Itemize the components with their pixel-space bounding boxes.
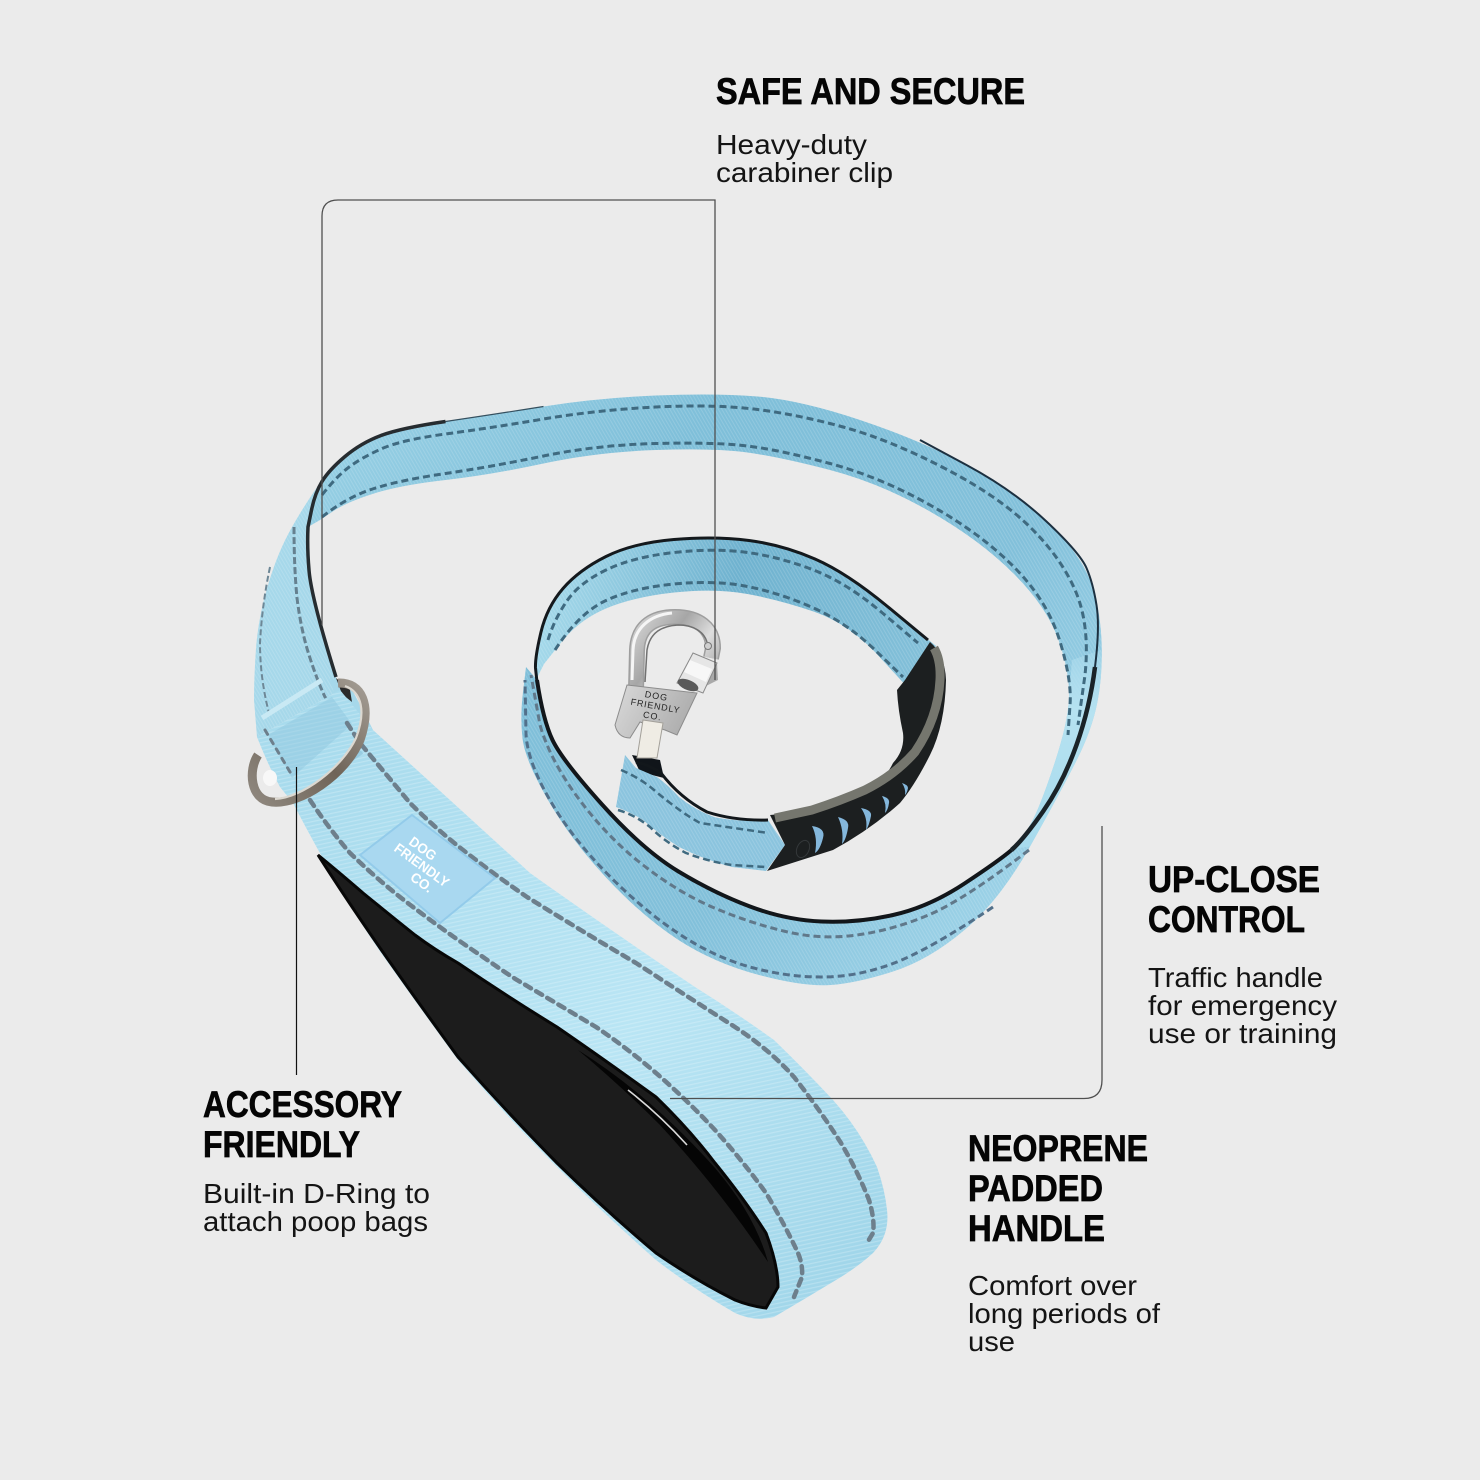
carabiner clip — [615, 613, 718, 758]
leash: main outer loop strap — [308, 394, 1102, 985]
callout: up-close control: UP-CLOSE — [1148, 859, 1320, 900]
callout: safe and secure: carabiner clip — [716, 157, 893, 188]
carabiner plate: DOG — [644, 689, 669, 703]
carabiner plate — [615, 685, 697, 738]
neoprene padding — [318, 855, 778, 1308]
callout: neoprene padded handle: PADDED — [968, 1168, 1103, 1209]
leash: left strap section — [254, 480, 347, 737]
leash: inner loop strap — [535, 538, 936, 690]
callout: safe and secure — [716, 71, 1025, 188]
rubber brand label — [360, 815, 495, 923]
callout: up-close control: Traffic handle — [1148, 962, 1323, 993]
callout: up-close control — [1148, 859, 1337, 1049]
callout: neoprene padded handle: HANDLE — [968, 1208, 1105, 1249]
callout: safe and secure: SAFE AND SECURE — [716, 71, 1025, 112]
leash illustration — [252, 394, 1102, 1319]
callout: up-close control: use or training — [1148, 1018, 1337, 1049]
callout: safe and secure: Heavy-duty — [716, 129, 867, 160]
traffic handle: rubber grip — [767, 642, 946, 871]
callout: neoprene padded handle: NEOPRENE — [968, 1128, 1148, 1169]
callout: neoprene padded handle: use — [968, 1326, 1015, 1357]
callout: up-close control: CONTROL — [1148, 899, 1305, 940]
rubber brand label: CO. — [407, 869, 436, 896]
leader line: accessory friendly to D-ring — [296, 767, 298, 1075]
leader line: safe and secure to carabiner — [322, 200, 715, 680]
callout: neoprene padded handle: long periods of — [968, 1298, 1160, 1329]
callout: accessory friendly — [203, 1084, 430, 1237]
rubber brand label: FRIENDLY — [391, 840, 453, 891]
callout: neoprene padded handle — [968, 1128, 1160, 1357]
leash: strap end tab at clip — [616, 755, 785, 871]
callout: neoprene padded handle: Comfort over — [968, 1270, 1137, 1301]
callout: accessory friendly: FRIENDLY — [203, 1124, 360, 1165]
leader line: up-close control and neoprene handle — [670, 826, 1102, 1098]
padded handle strap — [257, 678, 887, 1319]
callout: accessory friendly: ACCESSORY — [203, 1084, 402, 1125]
callout: up-close control: for emergency — [1148, 990, 1337, 1021]
carabiner plate: FRIENDLY — [630, 697, 681, 715]
callout: accessory friendly: Built-in D-Ring to — [203, 1178, 430, 1209]
icon: D-ring — [252, 683, 365, 802]
carabiner plate: CO. — [642, 709, 663, 723]
callout: accessory friendly: attach poop bags — [203, 1206, 428, 1237]
rubber brand label: DOG — [406, 833, 440, 864]
